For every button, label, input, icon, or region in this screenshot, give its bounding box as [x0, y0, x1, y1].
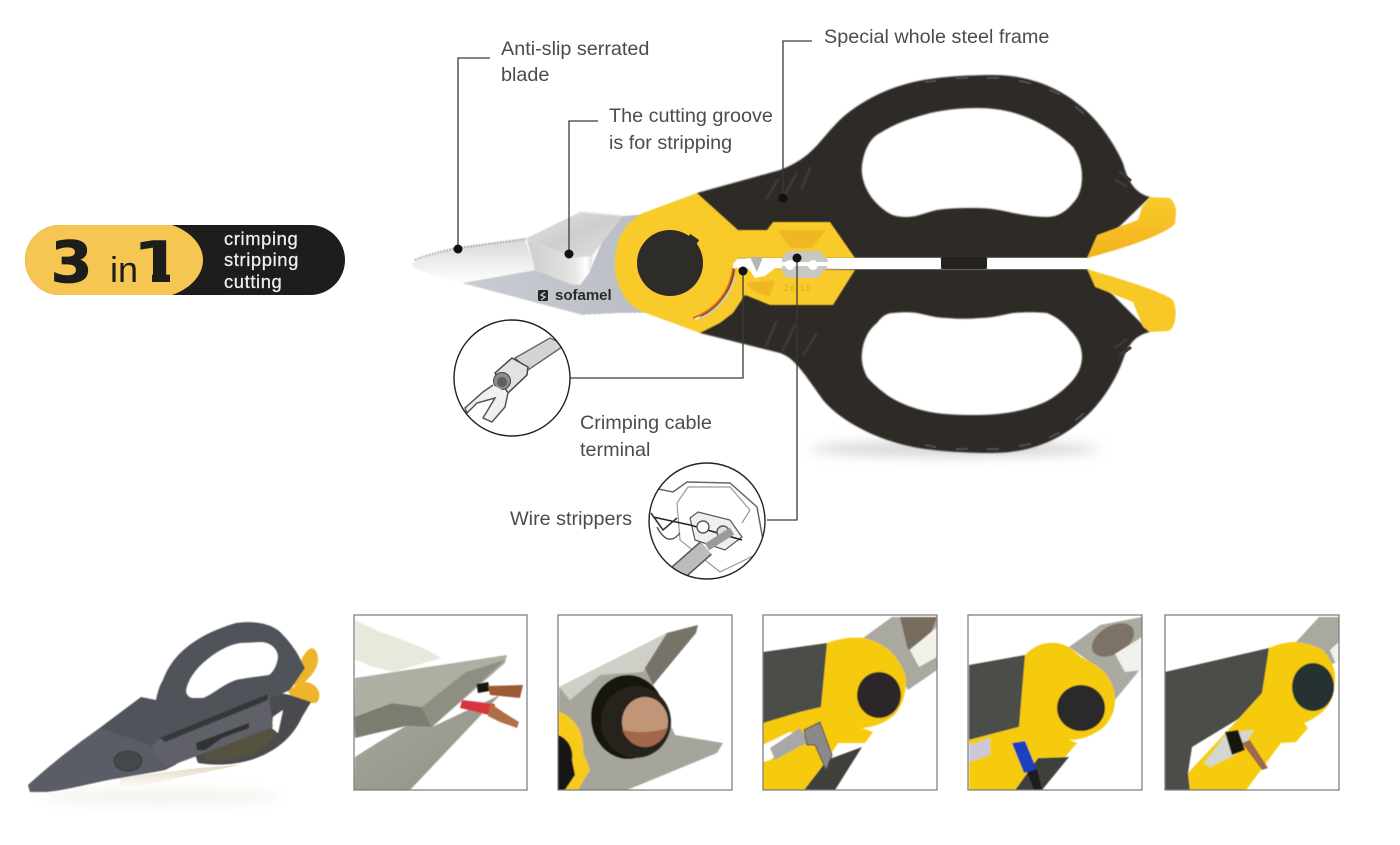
gauge numbers: 2.6 1.5 — [784, 284, 811, 293]
ground shadow — [810, 442, 1100, 456]
upper silver blade tip — [412, 239, 535, 283]
blade serrations — [415, 239, 525, 260]
photo 3: crimping terminal — [763, 615, 937, 790]
badge feature list: stripping — [224, 249, 299, 270]
sheath cover — [151, 695, 273, 768]
badge feature list: crimping — [224, 228, 298, 249]
back handle — [190, 690, 311, 765]
callout: anti-slip serrated blade — [454, 38, 649, 254]
lower black handle — [700, 269, 1150, 453]
stripping plate — [778, 251, 838, 278]
photo 2: cutting thick cable — [558, 615, 732, 790]
pivot dot — [114, 751, 142, 771]
blades — [412, 212, 665, 315]
icon: terminal in circle — [465, 338, 565, 422]
axle keyway — [685, 234, 699, 248]
handle grip dashes — [926, 78, 1083, 449]
callout: cutting groove: is for stripping — [609, 132, 732, 154]
callout: anti-slip serrated blade: Anti-slip serrated — [501, 38, 649, 60]
front handle and body — [28, 622, 305, 792]
crimp V insert — [750, 257, 763, 272]
callout: steel frame — [778, 26, 1049, 202]
yellow handle tips — [1087, 197, 1176, 332]
icon: wire stripper in circle — [651, 482, 763, 578]
callout: crimping cable terminal: terminal — [580, 439, 650, 461]
callout: cutting groove: The cutting groove — [609, 105, 773, 127]
badge logo text: in — [110, 249, 138, 290]
lower body face — [28, 728, 165, 792]
sofamel logo: sofamel — [555, 287, 612, 304]
handle ridges — [766, 168, 1130, 355]
main scissors illustration — [412, 75, 1176, 456]
photo 4: crimping ferrule — [968, 615, 1142, 790]
callout: wire strippers: Wire strippers — [510, 508, 632, 530]
black handles — [697, 75, 1150, 453]
callout: cutting groove — [564, 105, 773, 258]
sheath slot — [196, 723, 249, 750]
white slot — [733, 258, 940, 278]
photo: scissors in closed sheath — [28, 622, 319, 805]
central groove facet — [527, 240, 593, 285]
badge logo text — [54, 239, 170, 284]
upper black handle — [697, 75, 1150, 258]
badge logo text: 3 — [50, 229, 93, 296]
upper silver blade body — [525, 212, 623, 258]
yellow collar and crimp frame — [615, 193, 855, 333]
badge logo text: 1 — [132, 229, 184, 296]
yellow rings — [292, 648, 318, 688]
callout: wire strippers — [510, 254, 802, 579]
badge feature list: cutting — [224, 271, 282, 292]
axle black cap — [637, 230, 703, 296]
badge feature list — [224, 228, 299, 292]
callout: crimping cable terminal — [454, 266, 748, 461]
badge: 3 in 1 — [25, 225, 345, 296]
lower steel blade — [462, 214, 665, 315]
callout: anti-slip serrated blade: blade — [501, 64, 549, 86]
orange crescent gap — [693, 268, 733, 318]
callout: steel frame: Special whole steel frame — [824, 26, 1049, 48]
photo 1: cutting cable — [354, 615, 527, 790]
pivot rivet — [941, 257, 987, 269]
callout: crimping cable terminal: Crimping cable — [580, 412, 712, 434]
photo 5: stripping wire — [1165, 615, 1341, 790]
